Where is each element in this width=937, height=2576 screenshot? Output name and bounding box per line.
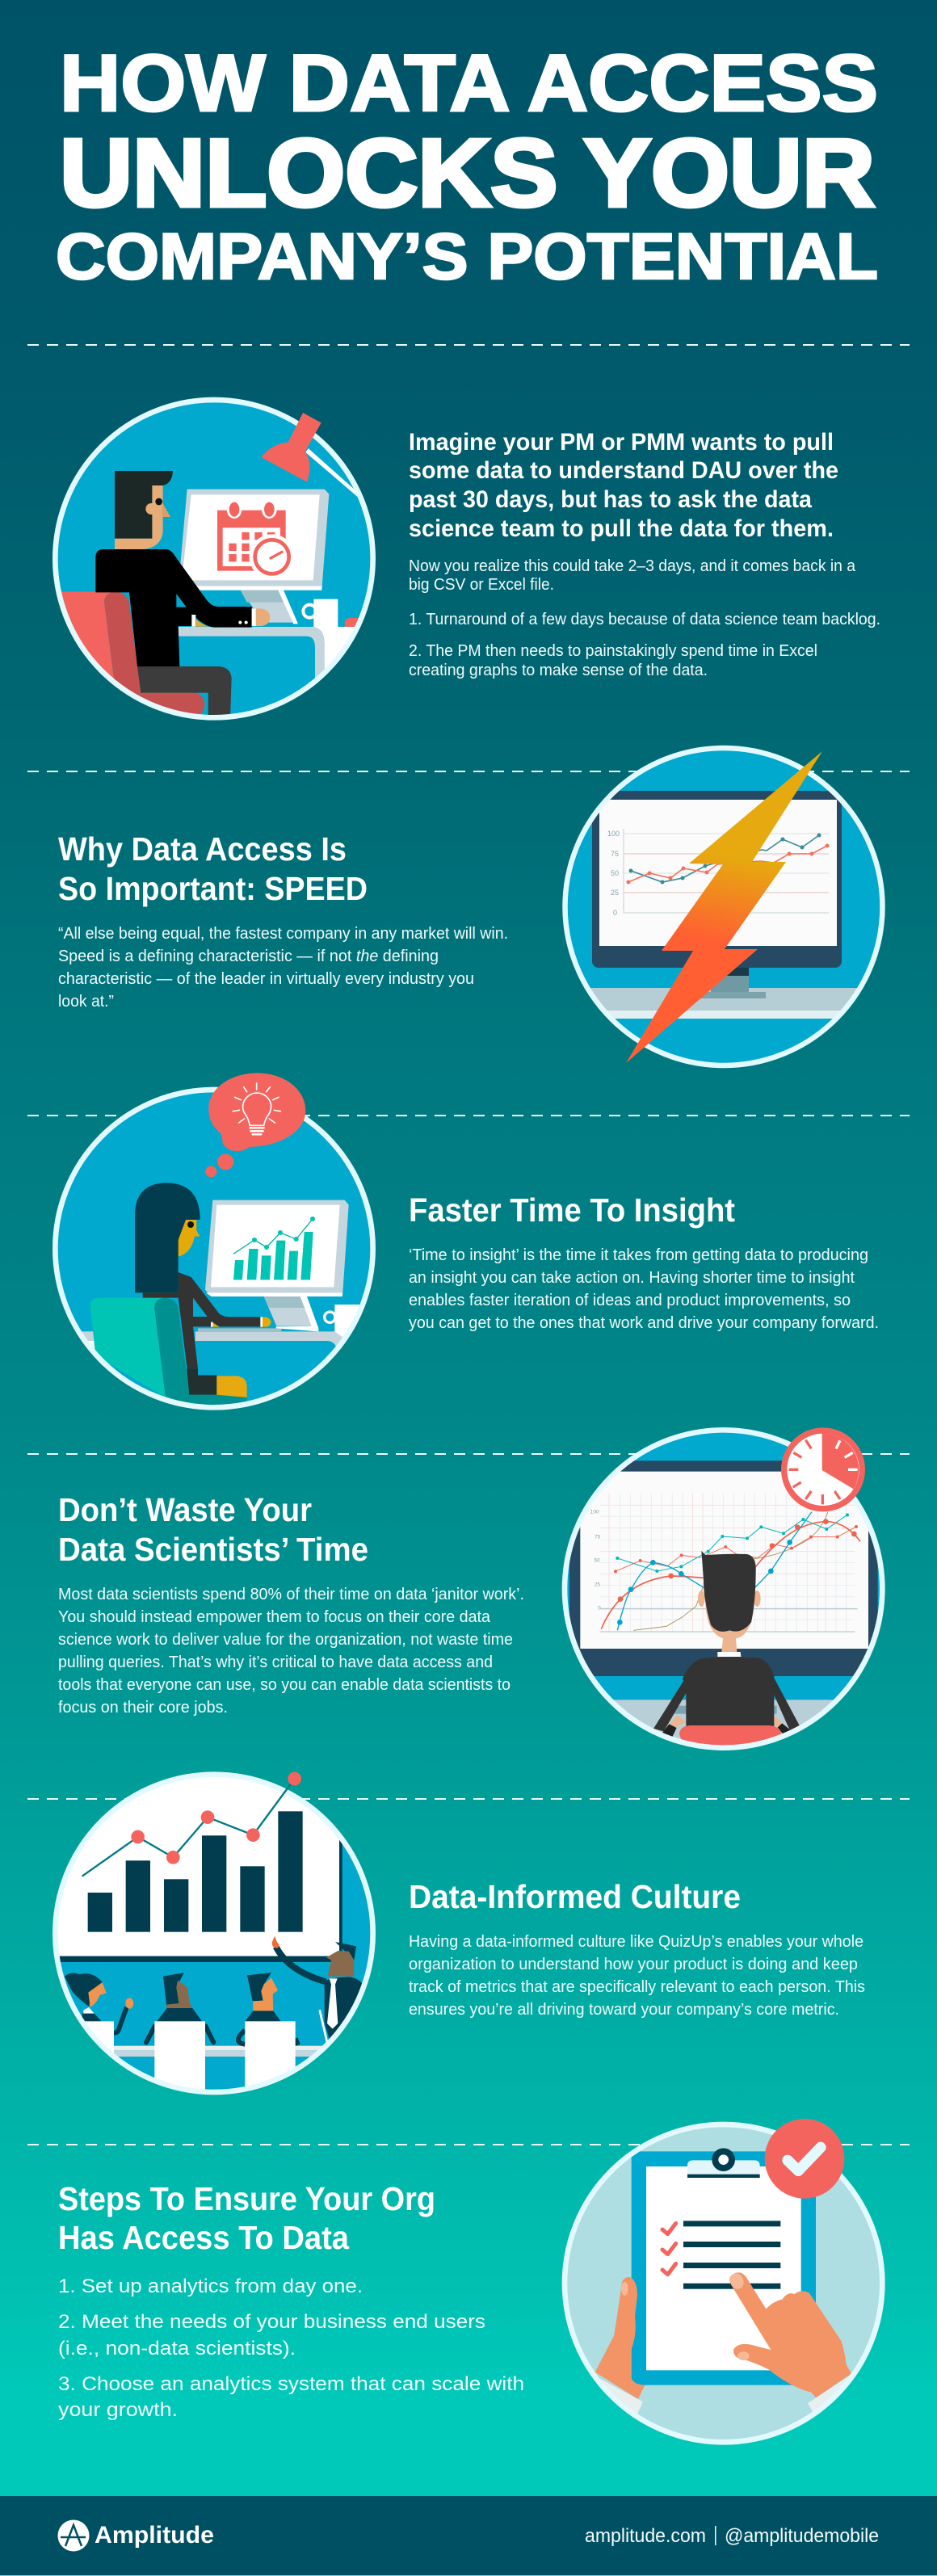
- text block: steps to ensure access: [58, 2180, 524, 2421]
- text block: why data access is so important: [58, 830, 508, 1011]
- text block: PM scenario: 1. Turnaround of a few days because of data science team backlog.: [409, 611, 880, 628]
- title: COMPANY’S POTENTIAL: [56, 221, 878, 293]
- illustration: man at desk with calendar on monitor: [55, 400, 373, 721]
- text block: why data access is so important: “All else being equal, the fastest company in any market will win.: [58, 925, 508, 943]
- illustration: monitor chart with lightning bolt: 100: [607, 830, 620, 838]
- text block: PM scenario: some data to understand DAU over the: [409, 457, 838, 484]
- text block: faster time to insight: [409, 1191, 879, 1332]
- text block: don't waste data scientists' time: focus on their core jobs.: [58, 1699, 228, 1717]
- text block: why data access is so important: So Important: SPEED: [58, 870, 368, 907]
- text block: data-informed culture: Data-Informed Culture: [409, 1878, 741, 1915]
- text block: don't waste data scientists' time: Don’t Waste Your: [58, 1491, 312, 1528]
- footer links: amplitude.com: [585, 2525, 706, 2547]
- text block: don't waste data scientists' time: tools that everyone can use, so you can enable data scientists to: [58, 1676, 511, 1694]
- text block: PM scenario: creating graphs to make sense of the data.: [409, 662, 708, 679]
- title: HOW DATA ACCESS: [60, 38, 878, 128]
- illustration: data scientist facing big chart with clock: 75: [595, 1534, 601, 1540]
- icon: check badge: [765, 2119, 844, 2199]
- text block: data-informed culture: Having a data-informed culture like QuizUp’s enables your whole: [409, 1933, 863, 1951]
- text block: PM scenario: past 30 days, but has to ask the data: [409, 486, 812, 513]
- line chart: [82, 1772, 301, 1876]
- logo: Amplitude: Amplitude: [95, 2522, 214, 2549]
- illustration: monitor chart with lightning bolt: 50: [611, 869, 619, 877]
- text block: data-informed culture: [409, 1878, 865, 2019]
- text block: steps to ensure access: 2. Meet the needs of your business end users: [58, 2311, 485, 2333]
- text block: steps to ensure access: (i.e., non-data scientists).: [58, 2338, 296, 2360]
- text block: steps to ensure access: 3. Choose an analytics system that can scale with: [58, 2373, 524, 2395]
- illustration: data scientist facing big chart with clock: 25: [595, 1582, 600, 1588]
- text block: faster time to insight: an insight you can take action on. Having shorter time to insight: [409, 1269, 855, 1287]
- text block: why data access is so important: look at.”: [58, 993, 114, 1011]
- footer links: @amplitudemobile: [725, 2525, 879, 2547]
- logo: Amplitude: [58, 2520, 214, 2551]
- icon: light bulb: [233, 1083, 280, 1134]
- footer links: [585, 2525, 879, 2547]
- text block: don't waste data scientists' time: [58, 1491, 524, 1717]
- text block: data-informed culture: track of metrics that are specifically relevant to each person. This: [409, 1978, 865, 1996]
- text block: data-informed culture: ensures you’re all driving toward your company’s core metric.: [409, 2001, 839, 2019]
- text block: PM scenario: science team to pull the data for them.: [409, 515, 834, 542]
- illustration: monitor chart with lightning bolt: [562, 745, 885, 1068]
- illustration: woman at desk with lightbulb thought: [55, 1073, 373, 1410]
- text block: don't waste data scientists' time: You should instead empower them to focus on their core data: [58, 1608, 491, 1626]
- illustration: data scientist facing big chart with clock: [553, 1427, 893, 1754]
- illustration: monitor chart with lightning bolt: 75: [611, 850, 619, 858]
- text block: faster time to insight: Faster Time To Insight: [409, 1191, 735, 1229]
- illustration: monitor chart with lightning bolt: 25: [611, 889, 619, 897]
- text block: PM scenario: 2. The PM then needs to painstakingly spend time in Excel: [409, 642, 817, 660]
- title: [56, 38, 878, 293]
- text block: steps to ensure access: your growth.: [58, 2399, 178, 2421]
- footer: [0, 2496, 937, 2576]
- illustration: data scientist facing big chart with clock: 0: [598, 1606, 601, 1612]
- text block: PM scenario: big CSV or Excel file.: [409, 576, 554, 594]
- text block: why data access is so important: Why Data Access Is: [58, 830, 347, 868]
- text block: steps to ensure access: Has Access To Data: [58, 2219, 350, 2256]
- icon: lightning bolt: [626, 751, 822, 1063]
- text block: faster time to insight: ‘Time to insight’ is the time it takes from getting data to producing: [409, 1246, 868, 1264]
- text block: PM scenario: Imagine your PM or PMM wants to pull: [409, 429, 834, 456]
- text block: faster time to insight: enables faster iteration of ideas and product improvements, so: [409, 1292, 851, 1309]
- text block: steps to ensure access: 1. Set up analytics from day one.: [58, 2276, 363, 2297]
- illustration: team presentation with bar chart: [44, 1767, 373, 2094]
- text block: don't waste data scientists' time: science work to deliver value for the organization, not waste time: [58, 1631, 513, 1649]
- text block: steps to ensure access: Steps To Ensure Your Org: [58, 2180, 435, 2217]
- title: UNLOCKS YOUR: [60, 120, 875, 227]
- illustration: clipboard checklist with hands: [565, 2119, 882, 2442]
- text block: don't waste data scientists' time: Data Scientists’ Time: [58, 1531, 368, 1568]
- text block: don't waste data scientists' time: pulling queries. That’s why it’s critical to have data access and: [58, 1654, 493, 1671]
- text block: PM scenario: Now you realize this could take 2–3 days, and it comes back in a: [409, 557, 856, 575]
- text block: data-informed culture: organization to understand how your product is doing and keep: [409, 1956, 858, 1973]
- text block: why data access is so important: Speed is a defining characteristic — if not the defining: [58, 948, 439, 965]
- text block: PM scenario: [409, 429, 880, 679]
- illustration: monitor chart with lightning bolt: 0: [613, 909, 617, 917]
- text block: faster time to insight: you can get to the ones that work and drive your company forward.: [409, 1314, 879, 1332]
- text block: why data access is so important: characteristic — of the leader in virtually every industry you: [58, 970, 474, 988]
- text block: don't waste data scientists' time: Most data scientists spend 80% of their time on data ‘janitor work’.: [58, 1586, 524, 1603]
- icon: clock: [781, 1427, 865, 1511]
- illustration: data scientist facing big chart with clock: 100: [590, 1510, 599, 1515]
- illustration: data scientist facing big chart with clock: 50: [594, 1558, 600, 1564]
